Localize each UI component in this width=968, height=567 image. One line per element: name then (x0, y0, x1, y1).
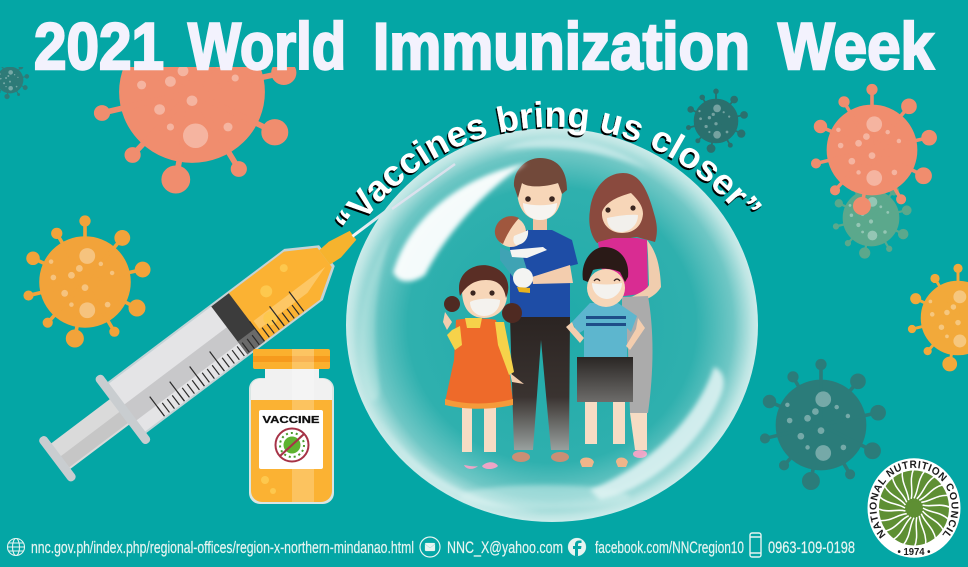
logo circular text: NATIONAL NUTRITION COUNCIL (870, 460, 958, 539)
baby (495, 216, 547, 293)
virus: large coral top left (95, 0, 296, 193)
title: 2021 (34, 9, 164, 83)
virus: orange right edge (908, 264, 968, 371)
plunger stopper (211, 293, 265, 354)
graduation ticks (149, 292, 304, 417)
icon: facebook (568, 538, 586, 556)
virus: dark small near bubble (686, 89, 748, 153)
slogan curved text: “Vaccines bring us closer” (334, 100, 762, 228)
syringe (29, 129, 475, 495)
title: Week (778, 9, 934, 83)
logo: National Nutrition Council (868, 458, 960, 558)
vaccine vial (249, 349, 334, 504)
father (510, 158, 578, 462)
vial cap (253, 349, 330, 369)
title background band (0, 0, 968, 67)
title: Immunization (373, 9, 750, 83)
logo circular text: • 1974 • (897, 547, 931, 558)
virus: orange left (24, 216, 150, 347)
hub (319, 228, 359, 265)
icon: phone (750, 533, 761, 557)
website text: nnc.gov.ph/index.php/regional-offices/region-x-northern-mindanao.html (31, 538, 414, 557)
bubble (346, 128, 758, 522)
email text: NNC_X@yahoo.com (447, 538, 563, 557)
label text: VACCINE (262, 414, 320, 426)
vaccine liquid (226, 234, 343, 343)
flange (94, 373, 152, 446)
bubble highlights (360, 138, 724, 512)
phone text: 0963-109-0198 (768, 538, 855, 557)
virus: faded green right (833, 177, 911, 258)
needle (352, 162, 451, 238)
icon: globe (8, 538, 24, 556)
mother (589, 173, 661, 458)
title: World (188, 9, 346, 83)
plunger rod (47, 392, 139, 472)
icon: mail (420, 537, 440, 557)
crossed virus icon (276, 428, 308, 462)
girl (443, 265, 524, 469)
virus: coral top right (812, 84, 936, 214)
barrel (104, 231, 347, 436)
vial body (249, 378, 334, 504)
boy (566, 247, 645, 467)
footer contact bar (8, 533, 855, 557)
needle inside bubble (392, 164, 455, 209)
title (34, 9, 934, 83)
facebook text: facebook.com/NNCregion10 (595, 538, 744, 557)
vial label (259, 410, 323, 469)
logo sunburst (877, 469, 951, 547)
virus: dark lower right (761, 359, 885, 489)
family illustration (443, 158, 661, 469)
virus: small dark top left (0, 61, 29, 99)
